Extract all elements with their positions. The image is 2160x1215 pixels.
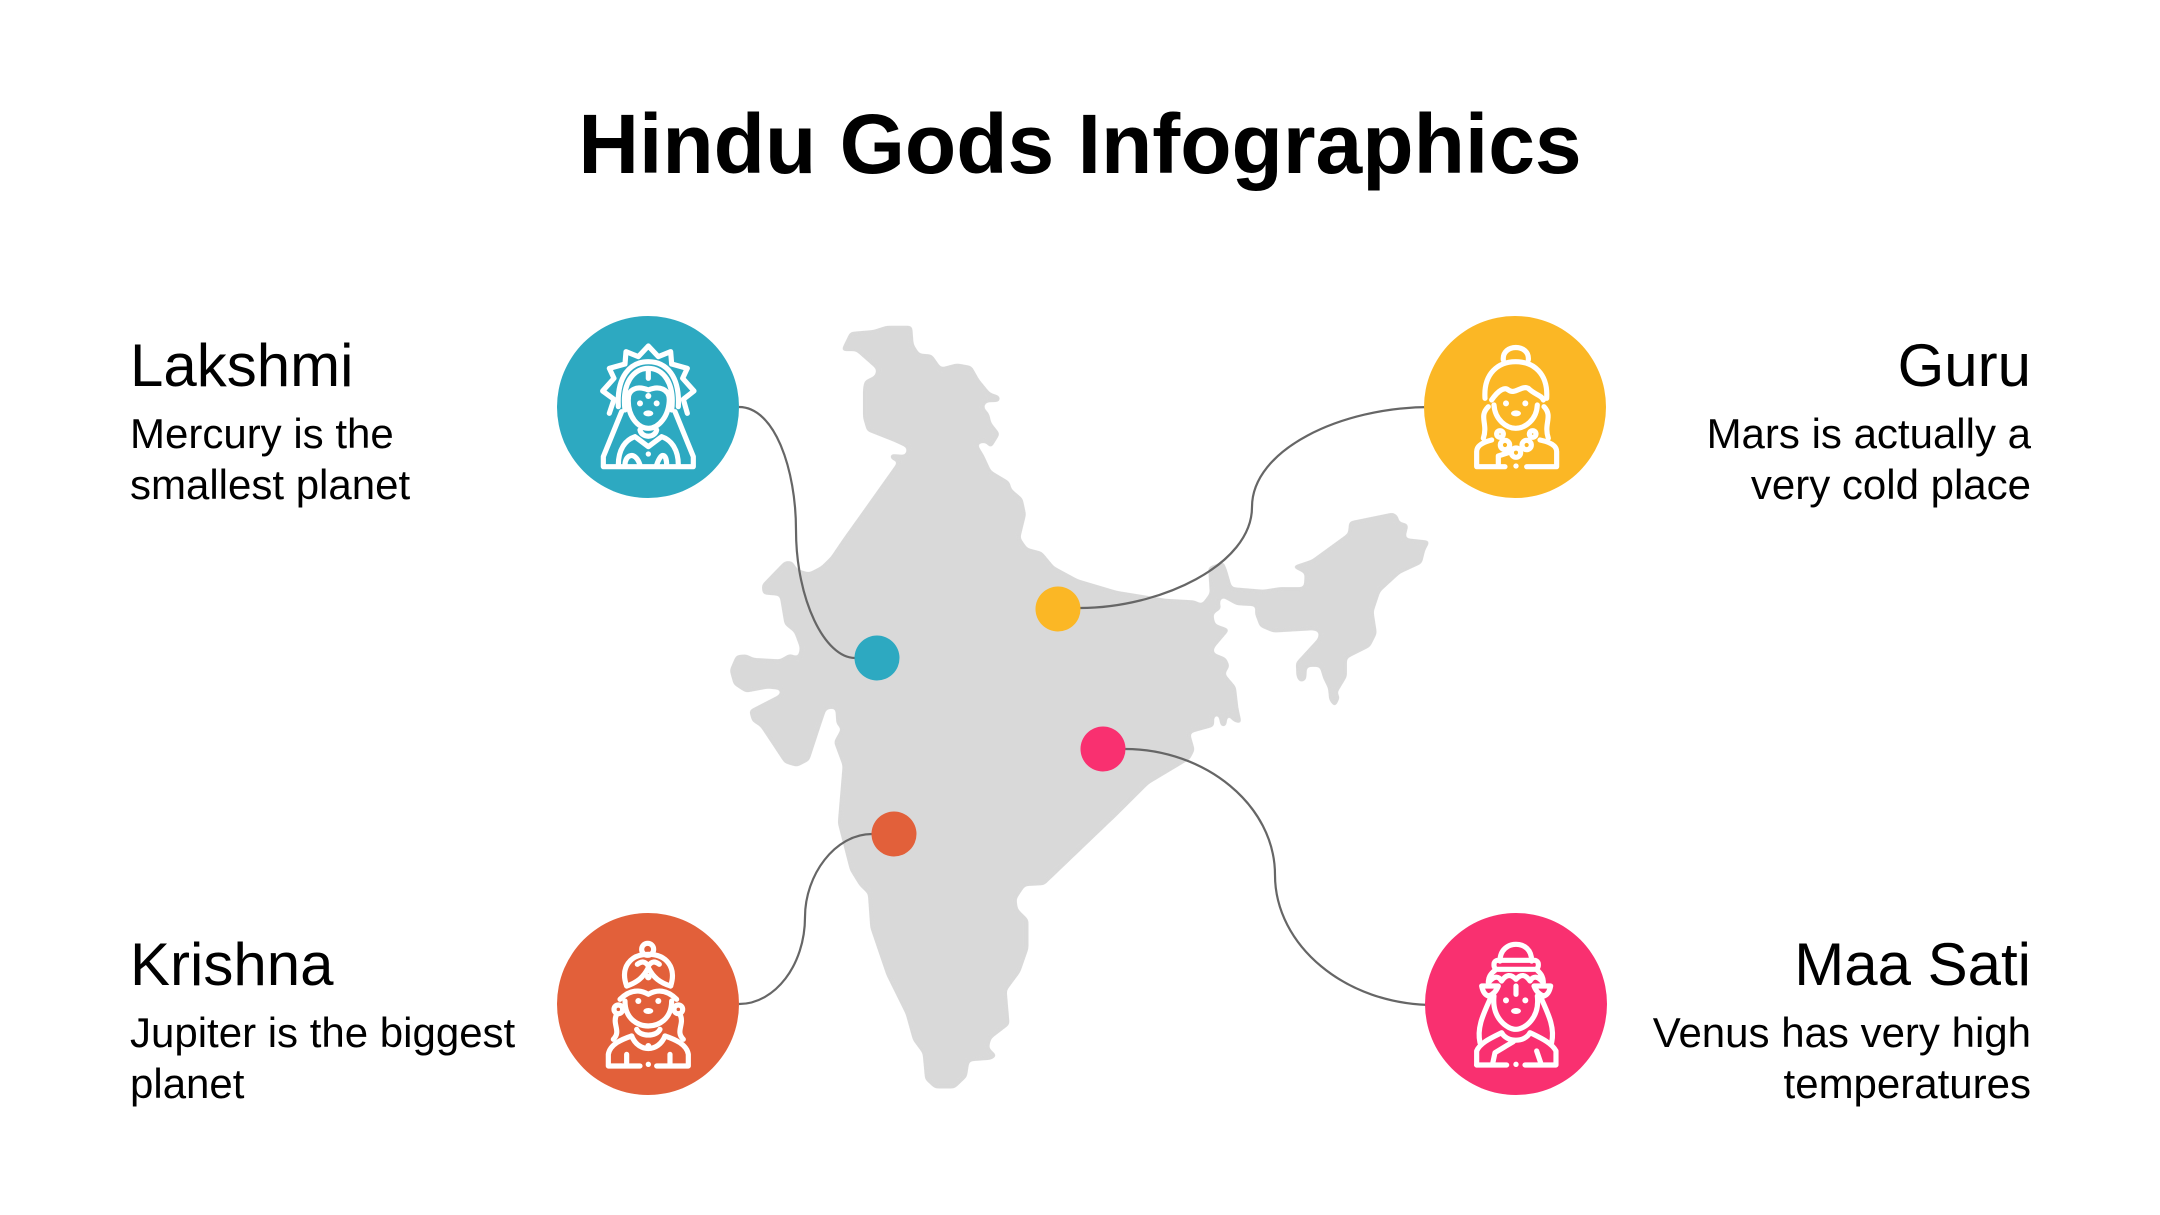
panel: Krishna bbox=[130, 812, 916, 1107]
panel: Maa Sati bbox=[1080, 726, 2031, 1107]
Krishna description: planet bbox=[130, 1060, 245, 1107]
Guru description: very cold place bbox=[1751, 461, 2031, 508]
icon: Lakshmi bbox=[557, 316, 739, 498]
Guru heading: Guru bbox=[1898, 332, 2031, 399]
map dot: Guru bbox=[1036, 586, 1080, 632]
connector: Guru bbox=[1080, 407, 1431, 608]
icon: Maa Sati bbox=[1425, 913, 1607, 1095]
panel: Lakshmi bbox=[130, 316, 900, 680]
map dot: Maa Sati bbox=[1080, 726, 1126, 772]
Maa Sati description: temperatures bbox=[1784, 1060, 2031, 1107]
Krishna description: Jupiter is the biggest bbox=[130, 1009, 516, 1056]
Lakshmi description: Mercury is the bbox=[130, 410, 394, 457]
map dot: Krishna bbox=[872, 812, 916, 856]
map dot: Lakshmi bbox=[854, 636, 900, 680]
Lakshmi heading: Lakshmi bbox=[130, 332, 353, 399]
icon: Krishna bbox=[557, 913, 739, 1095]
connector: Maa Sati bbox=[1125, 749, 1434, 1005]
connector: Lakshmi bbox=[739, 407, 855, 658]
icon: Guru bbox=[1424, 316, 1606, 498]
title: Hindu Gods Infographics bbox=[578, 97, 1582, 191]
connector: Krishna bbox=[739, 834, 872, 1004]
Krishna heading: Krishna bbox=[130, 931, 334, 998]
Lakshmi description: smallest planet bbox=[130, 461, 410, 508]
Maa Sati description: Venus has very high bbox=[1653, 1009, 2031, 1056]
panel: Guru bbox=[1036, 316, 2032, 632]
Maa Sati heading: Maa Sati bbox=[1794, 931, 2031, 998]
Guru description: Mars is actually a bbox=[1707, 410, 2032, 457]
map of India bbox=[730, 326, 1430, 1088]
